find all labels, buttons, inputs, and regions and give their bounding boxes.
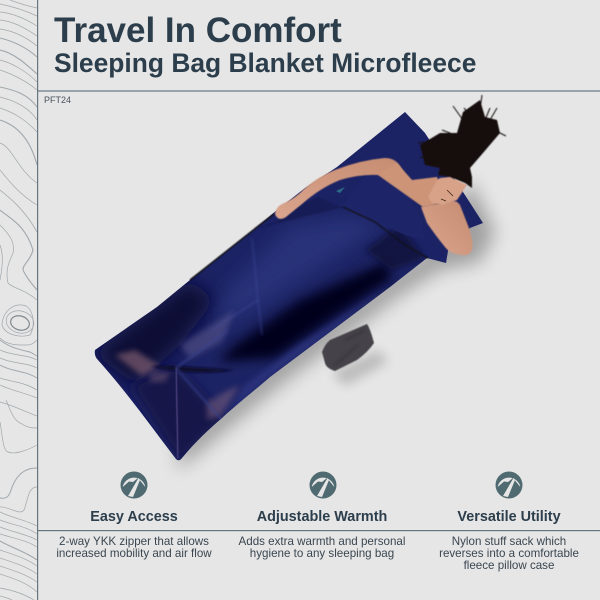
subtitle: Sleeping Bag Blanket Microfleece bbox=[54, 48, 476, 78]
feature text: adjustable warmth bbox=[238, 535, 405, 560]
upper bag fold bbox=[343, 174, 424, 240]
skin: chest and neck bbox=[378, 163, 445, 207]
feature text: easy access: increased mobility and air flow bbox=[56, 547, 212, 560]
skin: right arm bbox=[421, 201, 472, 255]
photo: woman in sleeping bag bbox=[93, 95, 506, 470]
skin: left arm and hand bbox=[275, 158, 408, 219]
vertical divider bbox=[37, 0, 38, 600]
feature text: versatile utility bbox=[439, 535, 579, 572]
feature text: versatile utility: fleece pillow case bbox=[464, 559, 554, 572]
icon: mountain badge 2 bbox=[310, 472, 336, 498]
feature heading: versatile utility: Versatile Utility bbox=[457, 508, 561, 524]
stuff sack bbox=[322, 324, 388, 386]
face bbox=[428, 177, 467, 205]
feature text: easy access bbox=[56, 535, 212, 560]
zipper edge bbox=[190, 214, 274, 280]
feature heading: adjustable warmth: Adjustable Warmth bbox=[257, 508, 387, 524]
title: Travel In Comfort bbox=[54, 11, 342, 50]
header divider bbox=[38, 90, 600, 92]
feature divider bbox=[38, 530, 600, 531]
feature text: adjustable warmth: hygiene to any sleeping bag bbox=[250, 547, 394, 560]
product code: PFT24 bbox=[44, 95, 71, 105]
feature text: versatile utility: reverses into a comfortable bbox=[439, 547, 579, 560]
feature text: versatile utility: Nylon stuff sack which bbox=[452, 535, 566, 548]
icon: mountain badge 3 bbox=[496, 472, 522, 498]
hair bbox=[418, 95, 506, 188]
feature heading: easy access: Easy Access bbox=[90, 508, 178, 524]
feature text: easy access: 2-way YKK zipper that allows bbox=[59, 535, 209, 548]
feature text: adjustable warmth: Adds extra warmth and personal bbox=[239, 535, 405, 548]
topographic contour pattern bbox=[0, 0, 37, 600]
icon: mountain badge 1 bbox=[120, 472, 148, 498]
